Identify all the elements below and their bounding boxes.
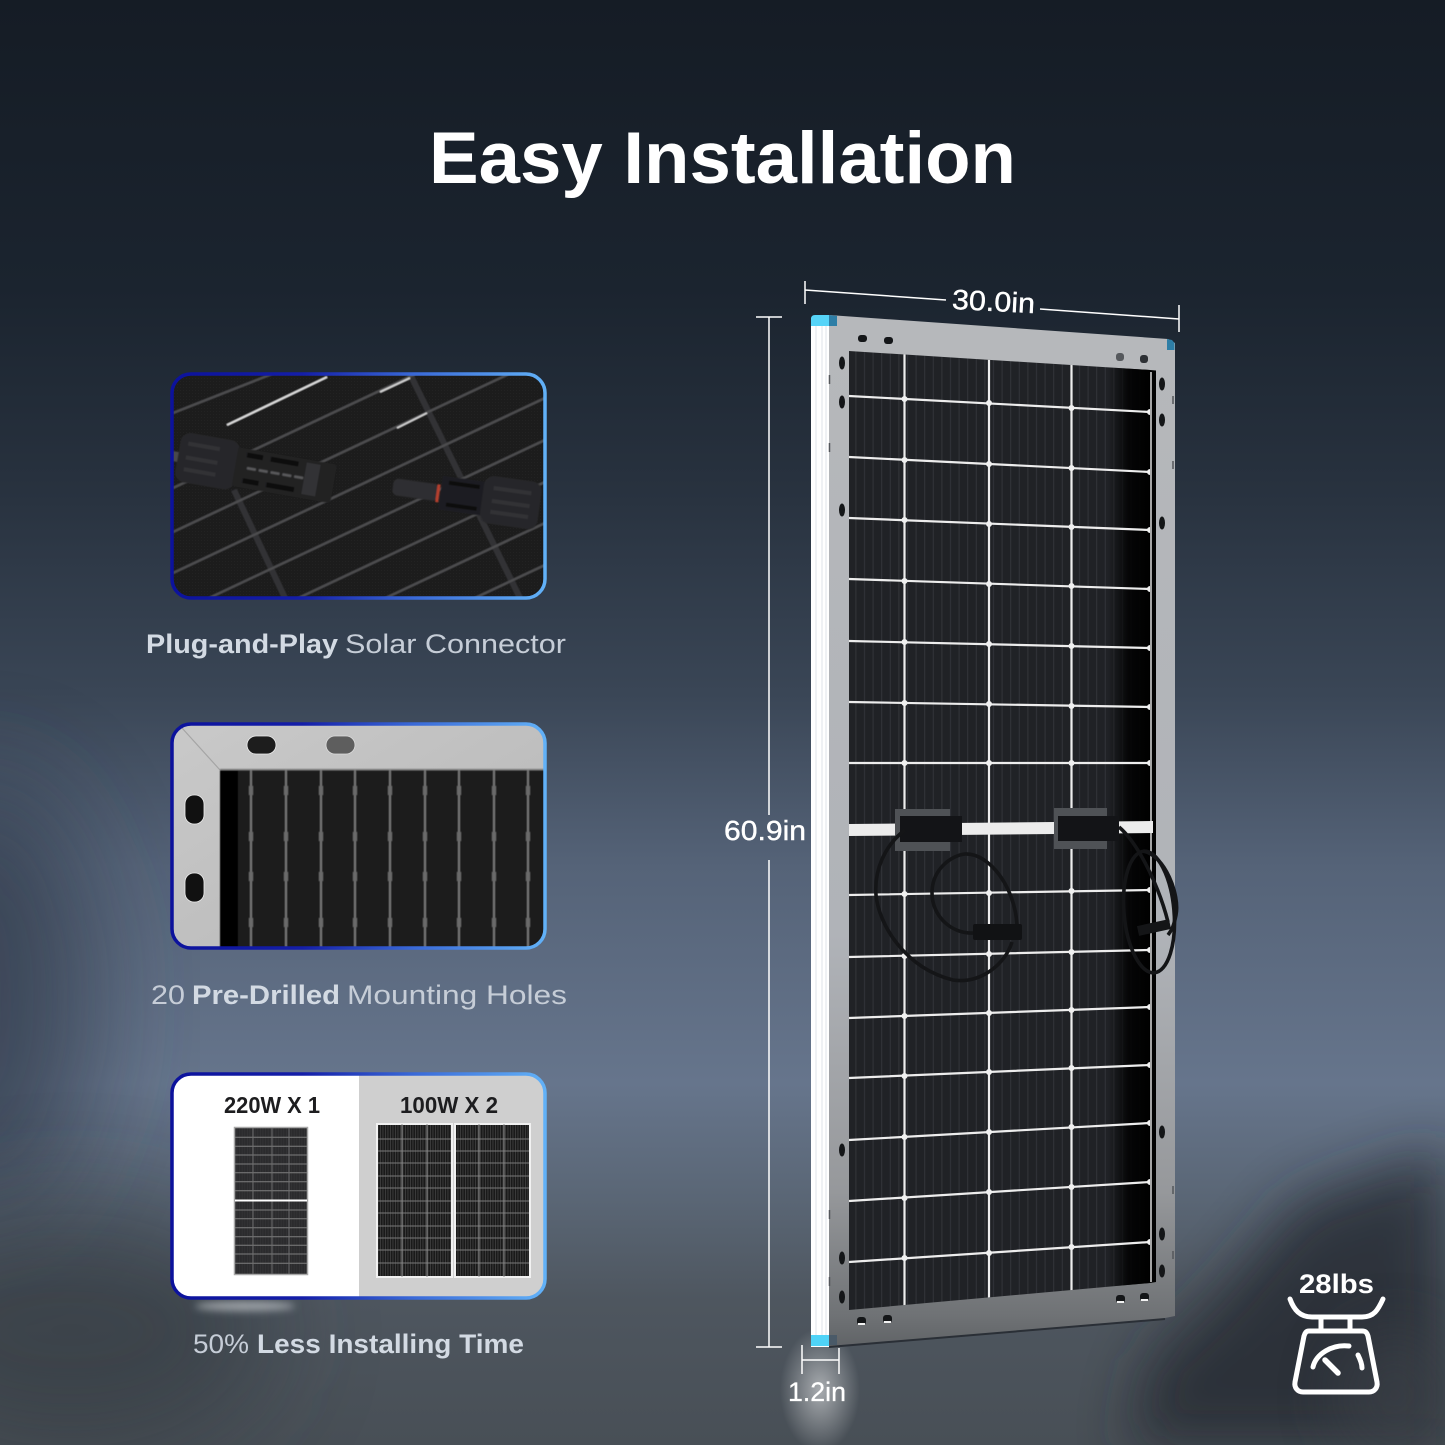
caption: pre-drilled: 20 (151, 980, 185, 1010)
label: 100W X 2: 100W X 2 (400, 1092, 498, 1118)
caption: pre-drilled: Mounting Holes (347, 980, 567, 1010)
title: Easy Installation (429, 118, 1016, 199)
junction box: right (1054, 808, 1119, 849)
panel: size comparison card (172, 1074, 545, 1298)
solar cells (849, 345, 1156, 1315)
dimension: width 30.0in (805, 281, 1179, 332)
photo: solar cells (220, 770, 549, 952)
weight label: 28lbs (1299, 1269, 1374, 1299)
dimension: depth 1.2in (788, 1345, 846, 1407)
cables and connectors (876, 827, 1179, 981)
frame corner (172, 724, 545, 948)
floor contact shadow (829, 1319, 1165, 1347)
caption: plug-and-play (146, 629, 566, 659)
mini panel: 220W (234, 1128, 308, 1274)
panel: mounting holes photo card (172, 724, 549, 952)
caption: less installing time: 50% (193, 1329, 249, 1359)
junction box: left (895, 809, 962, 851)
caption: pre-drilled: Pre-Drilled (192, 980, 340, 1010)
mini panels: 100W pair (377, 1124, 530, 1277)
panel: solar connector photo card (170, 372, 547, 600)
caption: plug-and-play: Plug-and-Play (146, 629, 338, 659)
dimension: width 30.0in: 30.0in (951, 284, 1036, 319)
photo background: black solar panel surface (174, 376, 544, 596)
busbars (904, 345, 1072, 1315)
side rail (811, 315, 1174, 1347)
dimension: height 60.9in: 60.9in (724, 815, 806, 846)
caption: plug-and-play: Solar Connector (345, 629, 566, 659)
dimension: depth 1.2in: 1.2in (788, 1377, 846, 1407)
caption: less installing time: Less Installing Time (257, 1329, 524, 1359)
connector: right (392, 476, 542, 530)
scale drawing (1290, 1299, 1383, 1392)
solar panel (811, 315, 1179, 1347)
label: 220W X 1: 220W X 1 (224, 1092, 320, 1118)
caption: pre-drilled (151, 980, 567, 1010)
frame mounting holes (830, 335, 1173, 1325)
mounting holes (185, 736, 355, 902)
panel frame (829, 315, 1175, 1347)
icon: weight scale 28lbs (1290, 1269, 1383, 1392)
dimension: height 60.9in (724, 317, 806, 1347)
connector: left (174, 433, 332, 502)
